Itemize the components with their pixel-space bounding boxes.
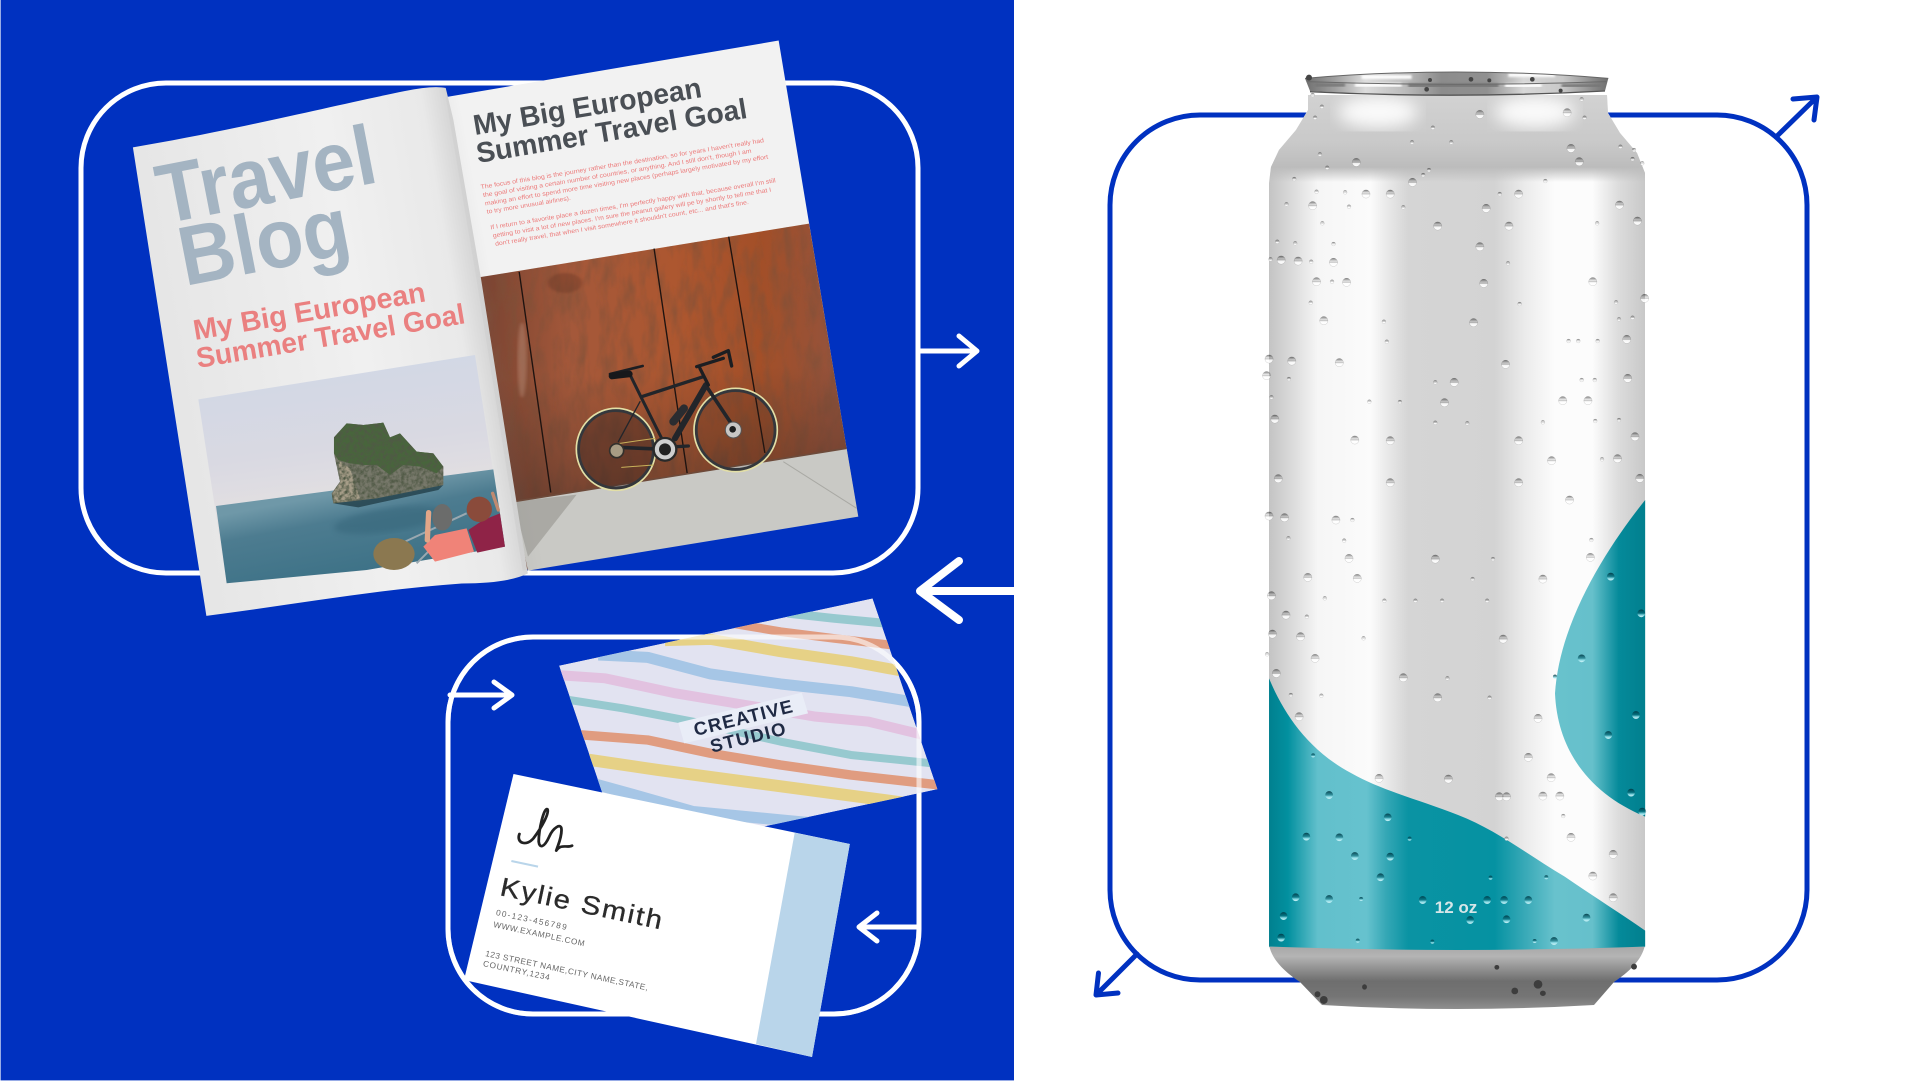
right page headline: My Big European [471, 72, 704, 142]
can base [1269, 945, 1645, 1009]
frame overlay on striped card [448, 637, 919, 1014]
right page body text: getting to visit a lot of new places. I'm sure the peanut gallery will pe by shortly to tell me that I [492, 187, 772, 240]
left page headline: Summer Travel Goal [194, 298, 467, 375]
can rim [1305, 72, 1608, 95]
right page body text [480, 136, 779, 249]
card contact details: 00-123-456789 [495, 908, 568, 932]
white business card [464, 774, 850, 1057]
card name: Kylie Smith [498, 872, 667, 935]
card logo text: CREATIVE [691, 695, 795, 740]
left page title [148, 107, 383, 304]
card contact details: WWW.EXAMPLE.COM [493, 920, 586, 948]
card logo text: STUDIO [708, 718, 788, 757]
right page body text: The focus of this blog is the journey rather than the destination, so for years I haven't really had [480, 137, 765, 191]
can teal waves [1265, 500, 1646, 1004]
aluminium can [1260, 72, 1660, 1009]
right page body text: making an effort to spend more time visiting new places (perhaps largely motivated by my effort [484, 154, 769, 207]
left page [133, 87, 548, 616]
arrow: up right [1776, 97, 1817, 137]
right page and wall photo [446, 41, 858, 570]
card contact details: COUNTRY,1234 [482, 959, 551, 982]
panel: blue background [1, 0, 1014, 1080]
frame: cards outline [448, 637, 919, 1014]
frame: magazine outline [81, 83, 918, 573]
card stripes [559, 598, 938, 826]
right page body text: don't really travel, that when I visit somewhere it shouldn't count, etc... and that's fine. [495, 199, 750, 248]
island photo [198, 355, 505, 583]
can size label: 12 oz [1435, 898, 1477, 917]
card base [464, 774, 850, 1057]
right page body text: the goal of visiting a certain number of countries, or anything. And I still don't, though I am [483, 148, 752, 199]
magazine spread [133, 41, 858, 616]
can body [1260, 90, 1660, 950]
arrow: magazine to the right [918, 336, 977, 366]
card blue band [756, 833, 850, 1057]
card contact details: 123 STREET NAME,CITY NAME,STATE, [485, 949, 649, 992]
droplets on lower can [1265, 553, 1646, 945]
right page headline: Summer Travel Goal [474, 93, 749, 170]
right page body text: to try more unusual airlines). [486, 195, 572, 216]
signature logo [511, 809, 572, 867]
arrow: down left [1096, 954, 1137, 995]
arrow: into cards from left [450, 682, 512, 708]
left page title: Travel [148, 107, 383, 242]
card contact details [482, 908, 649, 992]
droplets on upper can [1262, 93, 1649, 543]
frame: can outline [1110, 115, 1807, 980]
concrete floor and bicycle [513, 351, 858, 571]
right page body text: If I return to a favorite place a dozen times, I'm perfectly happy with that, because overall I'm still [490, 177, 776, 231]
left page headline: My Big European [191, 277, 428, 347]
striped business card [559, 598, 938, 826]
arrow: into cards from right [859, 913, 918, 941]
arrow: can to print items [920, 561, 1014, 620]
base droplets [1315, 964, 1637, 1004]
left page title: Blog [170, 179, 357, 304]
